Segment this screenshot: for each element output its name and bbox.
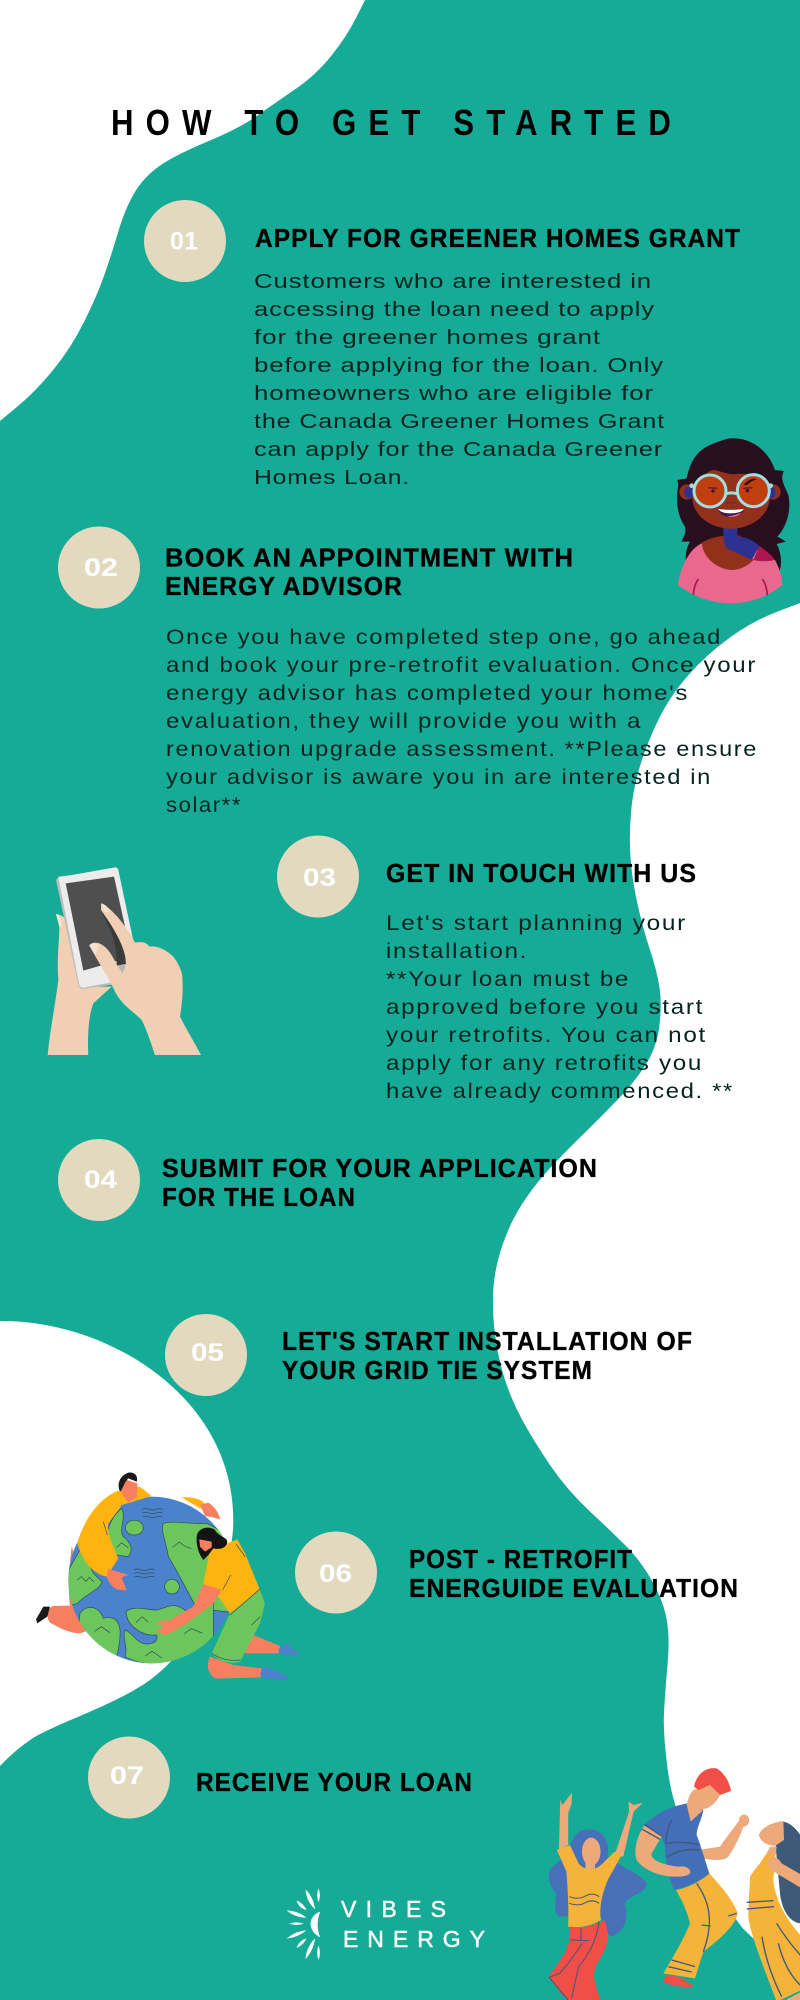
heading: step 6 xyxy=(409,1544,739,1603)
man: torso and arms xyxy=(77,1487,152,1577)
number badge 04 xyxy=(58,1139,140,1221)
heading: step 5: LET'S START INSTALLATION OF xyxy=(282,1326,693,1356)
body text: step 1: Homes Loan. xyxy=(254,466,410,489)
body text: step 1 xyxy=(254,270,665,489)
heading: step 5: YOUR GRID TIE SYSTEM xyxy=(282,1355,593,1385)
illustration: dancing woman in yellow dress xyxy=(747,1821,800,2000)
logo wordmark xyxy=(341,1896,485,1952)
illustration: people hugging the globe xyxy=(36,1473,302,1680)
illustration: dancing woman in yellow with blue hair xyxy=(548,1793,646,2000)
number badge 02: 02 xyxy=(84,554,118,582)
background: lower-left white blob xyxy=(0,1321,233,1766)
body text: step 1: homeowners who are eligible for xyxy=(254,382,654,405)
panel: step 4 xyxy=(58,1139,598,1221)
number badge 06: 06 xyxy=(319,1560,352,1588)
body text: step 2: and book your pre-retrofit evaluation. Once your xyxy=(166,653,757,677)
panel: step 6 xyxy=(295,1532,739,1614)
logo wordmark: VIBES xyxy=(341,1896,446,1922)
body text: step 3: approved before you start xyxy=(386,995,704,1019)
body text: step 2: energy advisor has completed your home's xyxy=(166,681,689,705)
number badge 03: 03 xyxy=(303,864,336,892)
panel: step 3 xyxy=(277,836,734,1103)
heading: step 2: BOOK AN APPOINTMENT WITH xyxy=(165,542,574,572)
panel: step 5 xyxy=(165,1314,693,1396)
body text: step 2: renovation upgrade assessment. **Please ensure xyxy=(166,737,758,761)
heading: step 6: ENERGUIDE EVALUATION xyxy=(409,1573,739,1603)
illustration: woman with glasses xyxy=(677,438,789,603)
logo wordmark: ENERGY xyxy=(343,1926,485,1952)
number badge 03 xyxy=(277,836,359,918)
body text: step 3: have already commenced. ** xyxy=(386,1079,734,1103)
body text: step 2 xyxy=(166,625,758,817)
heading: step 2 xyxy=(165,542,574,601)
body text: step 2: solar** xyxy=(166,793,242,817)
body text: step 3: apply for any retrofits you xyxy=(386,1051,703,1075)
number badge 04: 04 xyxy=(84,1166,117,1194)
body text: step 1: accessing the loan need to apply xyxy=(254,298,655,321)
heading: step 3: GET IN TOUCH WITH US xyxy=(386,858,697,888)
heading: step 4 xyxy=(162,1153,598,1212)
body text: step 1: Customers who are interested in xyxy=(254,270,652,293)
body text: step 2: Once you have completed step one, go ahead xyxy=(166,625,722,649)
heading: step 4: FOR THE LOAN xyxy=(162,1182,356,1212)
logo: Vibes Energy xyxy=(287,1888,485,1960)
body text: step 3: **Your loan must be xyxy=(386,967,630,991)
illustration: dancing man in blue shirt xyxy=(635,1768,749,1988)
body text: step 2: your advisor is aware you in are interested in xyxy=(166,765,712,789)
woman: legs and shoes xyxy=(240,1635,280,1653)
number badge 07 xyxy=(88,1736,170,1818)
number badge 02 xyxy=(58,526,140,608)
heading: step 2: ENERGY ADVISOR xyxy=(165,571,403,601)
number badge 06 xyxy=(295,1532,377,1614)
title: HOW TO GET STARTED xyxy=(111,102,683,143)
heading: step 4: SUBMIT FOR YOUR APPLICATION xyxy=(162,1153,598,1183)
number badge 05 xyxy=(165,1314,247,1396)
background: top-left white blob xyxy=(0,0,365,421)
heading: step 5 xyxy=(282,1326,693,1385)
man's rear leg and boot xyxy=(48,1547,100,1633)
heading: step 6: POST - RETROFIT xyxy=(409,1544,633,1574)
woman: shorts and shirt xyxy=(212,1590,265,1663)
number badge 01: 01 xyxy=(170,228,198,256)
body text: step 3: your retrofits. You can not xyxy=(386,1023,707,1047)
number badge 05: 05 xyxy=(191,1339,224,1367)
logo sun icon xyxy=(287,1888,320,1960)
body text: step 1: can apply for the Canada Greener xyxy=(254,438,663,461)
body text: step 3: installation. xyxy=(386,939,528,963)
body text: step 1: the Canada Greener Homes Grant xyxy=(254,410,665,433)
body text: step 3: Let's start planning your xyxy=(386,911,687,935)
heading: step 7: RECEIVE YOUR LOAN xyxy=(196,1767,473,1797)
background: right white blob xyxy=(493,603,800,1985)
panel: step 7 xyxy=(88,1736,473,1818)
number badge 07: 07 xyxy=(110,1762,144,1790)
panel: step 2 xyxy=(58,526,758,817)
woman: head and hair xyxy=(199,1540,213,1551)
body text: step 2: evaluation, they will provide you with a xyxy=(166,709,642,733)
illustration: hands holding phone xyxy=(48,867,201,1055)
body text: step 3 xyxy=(386,911,734,1103)
panel: step 1 xyxy=(144,200,741,489)
body text: step 1: before applying for the loan. Only xyxy=(254,354,664,377)
body text: step 1: for the greener homes grant xyxy=(254,326,601,349)
heading: step 1: APPLY FOR GREENER HOMES GRANT xyxy=(255,223,741,253)
number badge 01 xyxy=(144,200,226,282)
